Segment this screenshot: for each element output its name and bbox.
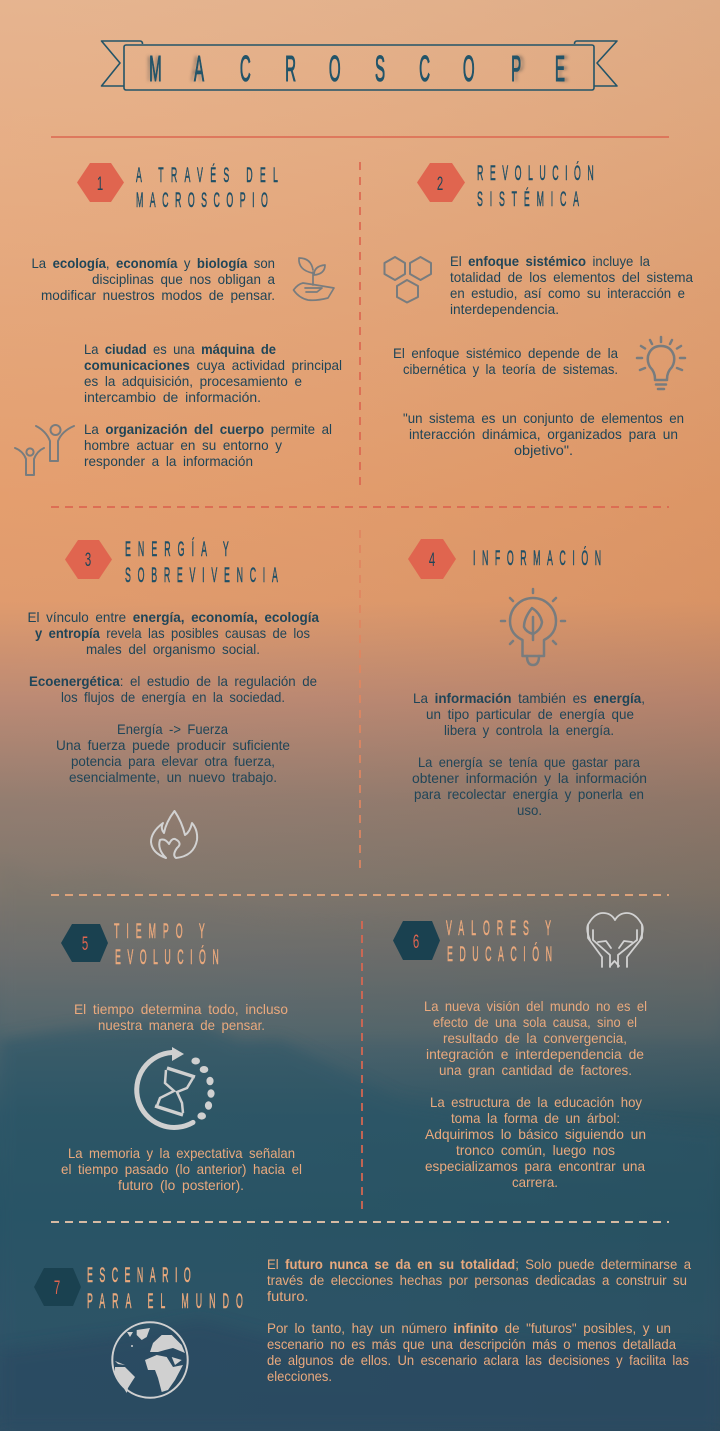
text: vínculo: y entropía revela las posibles causas de los — [35, 625, 310, 641]
heading 2 — [477, 160, 594, 211]
text: información — [413, 690, 645, 738]
text: energía fuerza: esencialmente, un nuevo trabajo. — [69, 769, 277, 785]
badge 1 — [77, 163, 124, 202]
text: quote: interacción dinámica, organizados para un — [409, 426, 678, 442]
text: ecología — [32, 255, 275, 303]
text: tiempo — [74, 1001, 288, 1033]
heading 3 — [125, 536, 278, 587]
heading 7: PARA EL MUNDO — [87, 1290, 243, 1313]
text: información: La información también es energía, — [413, 690, 645, 706]
badge 6 — [393, 921, 440, 960]
text: ciudad: comunicaciones cuya actividad principal — [84, 357, 342, 373]
text: energía — [412, 754, 647, 818]
text: futuro: El futuro nunca se da en su totalidad; Solo puede determinarse a — [267, 1256, 691, 1272]
text: nueva visión: resultado de la convergencia, — [443, 1030, 627, 1046]
text: ecología: disciplinas que nos obligan a — [92, 271, 275, 287]
panel 4: información — [408, 539, 647, 818]
text: energía fuerza: Una fuerza puede producir suficiente — [56, 737, 290, 753]
text: ecoenergética: Ecoenergética: el estudio de la regulación de — [29, 673, 317, 689]
heading 6 — [446, 917, 552, 966]
text: vínculo: El vínculo entre energía, economía, ecología — [28, 609, 319, 625]
header rule — [51, 136, 669, 138]
ribbon outline — [102, 41, 617, 90]
text: nueva visión: efecto de una sola causa, sino el — [433, 1014, 637, 1030]
badge 5: 5 — [82, 934, 88, 955]
text: cibernética: cibernética y la teoría de sistemas. — [403, 361, 618, 377]
text: escenario — [267, 1320, 689, 1384]
badge 6: 6 — [413, 932, 419, 953]
text: vínculo — [28, 609, 319, 657]
text: estructura: La estructura de la educación hoy — [430, 1094, 642, 1110]
heading 5: TIEMPO Y — [114, 920, 205, 943]
text: futuro: través de elecciones hechas por personas dedicadas a construir su — [267, 1272, 687, 1288]
text: enfoque sistémico: totalidad de los elementos del sistema — [450, 269, 693, 285]
text: cibernética: El enfoque sistémico depende de la — [393, 345, 618, 361]
badge 2 — [417, 163, 465, 202]
panel 7: escenario para el mundo — [34, 1256, 691, 1398]
badge 3 — [65, 540, 112, 579]
divider dashes — [51, 162, 669, 1222]
text: vínculo: males del organismo social. — [86, 641, 260, 657]
text: escenario: escenario no es más que una descripción más o menos detallada — [267, 1336, 676, 1352]
heading 1: MACROSCOPIO — [136, 189, 268, 212]
text: enfoque sistémico — [450, 253, 693, 317]
text: enfoque sistémico: interdependencia. — [450, 301, 559, 317]
heading 5 — [114, 920, 219, 969]
panel 2: revolución sistémica — [384, 160, 693, 458]
badge 3: 3 — [85, 550, 91, 571]
icon: hands holding heart — [587, 913, 643, 967]
text: información: un tipo particular de energía que — [426, 706, 634, 722]
text: tiempo: nuestra manera de pensar. — [98, 1017, 265, 1033]
text: futuro: futuro. — [267, 1288, 308, 1304]
text: nueva visión: una gran cantidad de factores. — [439, 1062, 632, 1078]
heading 4: INFORMACIÓN — [473, 545, 601, 570]
text: nueva visión — [424, 998, 647, 1078]
text: estructura — [425, 1094, 646, 1190]
text: memoria: futuro (lo posterior). — [118, 1177, 244, 1193]
text: energía: La energía se tenía que gastar para — [418, 754, 640, 770]
panel 3: energía y sobrevivencia — [28, 536, 319, 858]
badge 7: 7 — [54, 1278, 60, 1299]
badge 2: 2 — [437, 174, 443, 195]
text: enfoque sistémico: en estudio, así como su interacción e — [450, 285, 685, 301]
text: energía fuerza — [56, 721, 290, 785]
icon: light bulb — [637, 337, 685, 389]
text: memoria: La memoria y la expectativa señalan — [68, 1145, 295, 1161]
text: ecoenergética — [29, 673, 317, 705]
text: quote: objetivo". — [514, 442, 573, 458]
heading 1: A TRAVÉS DEL — [136, 162, 278, 187]
text: quote: "un sistema es un conjunto de elementos en — [403, 410, 684, 426]
badge 7 — [34, 1268, 81, 1306]
icon: hourglass in cycle — [137, 1047, 215, 1127]
text: enfoque sistémico: El enfoque sistémico incluye la — [450, 253, 650, 269]
text: ecología: La ecología, economía y biología son — [32, 255, 275, 271]
heading 3: SOBREVIVENCIA — [125, 564, 278, 587]
badge 5 — [61, 924, 108, 962]
heading 1 — [136, 162, 278, 212]
text: organización del cuerpo — [84, 421, 332, 469]
badge 4: 4 — [429, 550, 435, 571]
text: estructura: Adquirimos lo básico siguiendo un — [425, 1126, 646, 1142]
panel 5: tiempo y evolución — [61, 920, 302, 1193]
icon: plant in hand — [294, 258, 334, 300]
icon: globe — [112, 1322, 188, 1398]
text: organización del cuerpo: La organización del cuerpo permite al — [84, 421, 332, 437]
text: tiempo: El tiempo determina todo, incluso — [74, 1001, 288, 1017]
badge 4 — [408, 539, 456, 579]
text: estructura: tronco común, luego nos — [456, 1142, 615, 1158]
panel 1: a través del macroscopio — [15, 162, 342, 475]
text: nueva visión: integración e interdependencia de — [426, 1046, 644, 1062]
text: información: libera y controla la energía. — [444, 722, 614, 738]
icon: two people — [15, 425, 74, 475]
text: escenario: de algunos de ellos. Un escenario aclara las decisiones y facilita las — [267, 1352, 689, 1368]
heading 5: EVOLUCIÓN — [115, 944, 219, 969]
text: cibernética — [393, 345, 618, 377]
text: ecoenergética: los flujos de energía en la sociedad. — [61, 689, 285, 705]
text: escenario: elecciones. — [267, 1368, 332, 1384]
heading 3: ENERGÍA Y — [125, 536, 229, 561]
heading 7: ESCENARIO — [87, 1264, 191, 1287]
icon: flame — [151, 811, 197, 858]
title blur ghost: MAPE — [147, 48, 568, 89]
text: estructura: especializamos para encontrar una — [425, 1158, 645, 1174]
text: memoria: el tiempo pasado (lo anterior) hacia el — [61, 1161, 302, 1177]
text: ciudad: es la adquisición, procesamiento e — [84, 373, 302, 389]
text: ciudad: La ciudad es una máquina de — [84, 341, 276, 357]
text: ecología: modificar nuestros modos de pensar. — [41, 287, 275, 303]
title: MACROSCOPE — [149, 48, 565, 89]
text: nueva visión: La nueva visión del mundo no es el — [424, 998, 647, 1014]
text: energía fuerza: potencia para elevar otra fuerza, — [71, 753, 275, 769]
text: escenario: Por lo tanto, hay un número infinito de "futuros" posibles, y un — [267, 1320, 671, 1336]
title ribbon — [102, 41, 617, 90]
text: energía fuerza: Energía -> Fuerza — [117, 721, 228, 737]
text: estructura: toma la forma de un árbol: — [451, 1110, 620, 1126]
badge 1: 1 — [97, 174, 103, 195]
text: organización del cuerpo: responder a la información — [84, 453, 253, 469]
text: ciudad — [84, 341, 342, 405]
text: energía: para recolectar energía y ponerla en — [414, 786, 644, 802]
panel 6: valores y educación — [393, 913, 647, 1190]
heading 6: EDUCACIÓN — [447, 941, 552, 966]
icon: bulb with leaf — [501, 589, 565, 665]
text: quote — [403, 410, 684, 458]
heading 2: REVOLUCIÓN — [477, 160, 594, 185]
text: estructura: carrera. — [512, 1174, 558, 1190]
text: energía: uso. — [517, 802, 542, 818]
heading 2: SISTÉMICA — [477, 186, 579, 211]
text: memoria — [61, 1145, 302, 1193]
heading 7 — [87, 1264, 243, 1313]
text: organización del cuerpo: hombre actuar en su entorno y — [84, 437, 282, 453]
icon: three hexagons — [384, 257, 431, 302]
text: ciudad: intercambio de información. — [84, 389, 261, 405]
text: energía: obtener información y la información — [412, 770, 647, 786]
heading 6: VALORES Y — [446, 917, 551, 940]
text: futuro — [267, 1256, 691, 1304]
